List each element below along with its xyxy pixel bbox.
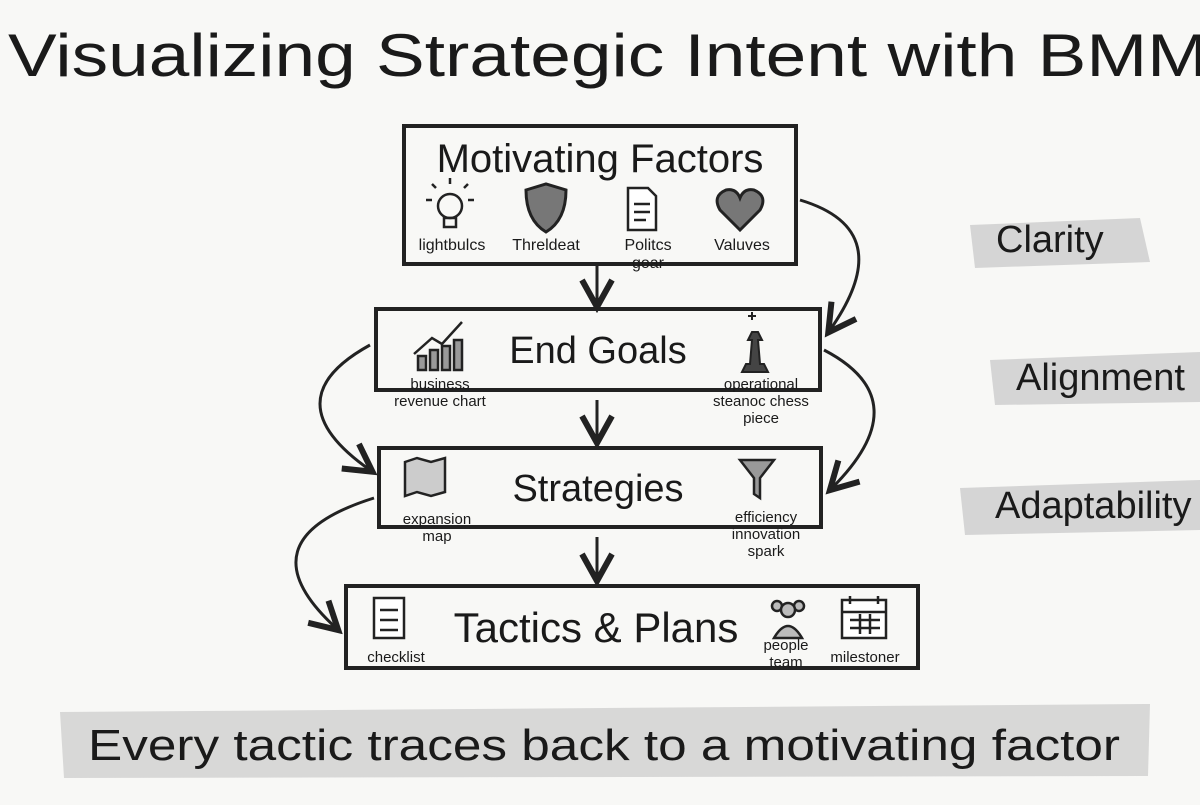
- banner: bottom message: [60, 704, 1150, 778]
- panel: strategies: Strategies: [512, 468, 684, 510]
- label: clarity: [970, 218, 1150, 268]
- arrow: curved left End Goals to Strategies: [320, 345, 370, 470]
- title: Visualizing Strategic Intent with BMM: [8, 22, 1200, 89]
- panel: strategies: [379, 448, 821, 560]
- panel: motivating factors: Motivating Factors: [437, 137, 763, 181]
- arrow: curved left Strategies to Tactics: [296, 498, 374, 628]
- panel: end goals: business: [410, 376, 470, 393]
- panel: tactics & plans: [346, 586, 918, 671]
- icon: checklist: [374, 598, 404, 638]
- panel: strategies: innovation: [732, 526, 800, 543]
- arrow: end goals to strategies: [596, 400, 598, 440]
- panel: end goals: piece: [743, 410, 779, 427]
- arrow: curved right MF to End Goals: [800, 200, 859, 330]
- panel: motivating factors: [404, 126, 796, 272]
- label: alignment: [990, 352, 1200, 405]
- panel: tactics & plans: Tactics & Plans: [454, 604, 738, 651]
- panel: motivating factors: Politcs: [624, 237, 672, 254]
- panel: strategies: map: [422, 528, 452, 545]
- panel: end goals: [376, 309, 820, 427]
- label: adaptability: [960, 480, 1200, 535]
- panel: end goals: revenue chart: [394, 393, 487, 410]
- panel: motivating factors: Valuves: [714, 237, 770, 254]
- icon: document: [628, 188, 656, 230]
- arrow: strategies to tactics: [596, 537, 598, 578]
- panel: end goals: End Goals: [509, 330, 687, 372]
- icon: heart: [717, 190, 763, 230]
- panel: motivating factors: Threldeat: [512, 237, 580, 254]
- panel: motivating factors: goar: [632, 255, 665, 272]
- panel: end goals: operational: [724, 376, 798, 393]
- panel: strategies: spark: [748, 543, 785, 560]
- icon: revenue chart: [414, 322, 462, 370]
- label: alignment: Alignment: [1016, 357, 1185, 399]
- panel: strategies: efficiency: [735, 509, 798, 526]
- arrow: curved right End Goals to Strategies: [824, 350, 874, 488]
- icon: people: [772, 601, 804, 638]
- panel: tactics & plans: milestoner: [830, 649, 900, 666]
- label: clarity: Clarity: [996, 219, 1104, 261]
- icon: map: [405, 458, 445, 496]
- panel: tactics & plans: checklist: [367, 649, 426, 666]
- icon: chess piece: [742, 312, 768, 372]
- panel: tactics & plans: people: [763, 637, 809, 654]
- panel: tactics & plans: team: [769, 654, 803, 671]
- icon: lightbulb: [426, 178, 474, 227]
- panel: motivating factors: lightbulcs: [419, 237, 485, 254]
- icon: calendar: [842, 596, 886, 638]
- panel: end goals: steanoc chess: [713, 393, 809, 410]
- icon: funnel: [740, 460, 774, 498]
- arrow: motivating to end goals: [596, 266, 598, 304]
- icon: shield: [526, 184, 566, 232]
- label: adaptability: Adaptability: [995, 485, 1191, 527]
- banner: bottom message: Every tactic traces back to a motivating factor: [88, 721, 1120, 770]
- panel: strategies: expansion: [403, 511, 471, 528]
